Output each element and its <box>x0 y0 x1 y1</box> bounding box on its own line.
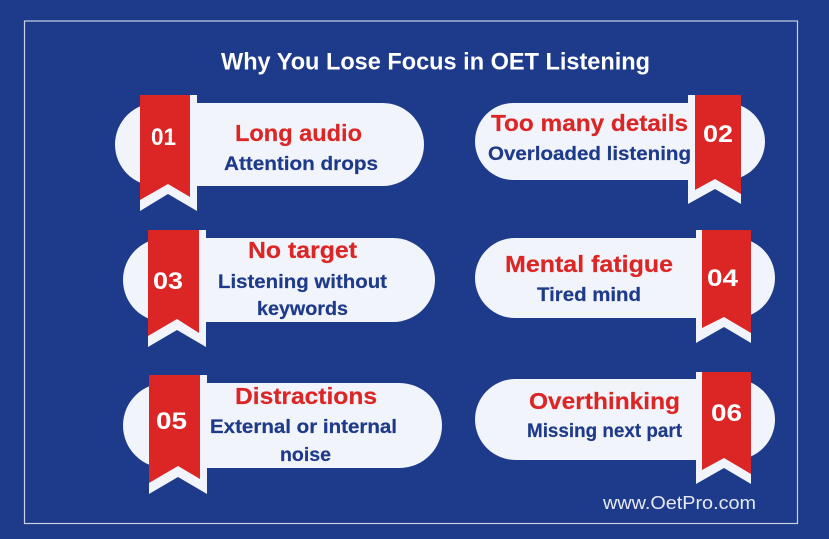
panel: 06 overthinking <box>475 372 775 484</box>
heading 06: Overthinking <box>529 388 680 414</box>
subtext 06: Missing next part <box>527 421 683 442</box>
subtext 05: noise <box>280 445 331 466</box>
ribbon 03 <box>148 230 206 347</box>
pill background 01 <box>115 103 424 186</box>
number 05: 05 <box>156 408 187 435</box>
ribbon 01 <box>140 95 197 211</box>
subtext 01: Attention drops <box>224 154 378 175</box>
panel: 02 too many details <box>475 95 765 204</box>
subtext 03: keywords <box>257 299 348 320</box>
title: Why You Lose Focus in OET Listening <box>221 48 650 76</box>
ribbon 06 <box>696 372 751 484</box>
number 03: 03 <box>153 268 183 295</box>
subtext 05: External or internal <box>210 417 397 438</box>
number 04: 04 <box>707 265 739 292</box>
subtext 03: Listening without <box>218 272 388 293</box>
ribbon 04 <box>696 230 751 343</box>
number 02: 02 <box>703 121 733 148</box>
ribbon 02 <box>688 95 741 204</box>
heading 02: Too many details <box>491 110 688 136</box>
pill background 05 <box>123 383 442 468</box>
subtext 05 <box>210 417 397 466</box>
panel: 04 mental fatigue <box>475 230 775 343</box>
website credit: www.OetPro.com <box>602 492 756 513</box>
panel: 03 no target <box>123 230 435 347</box>
number 06: 06 <box>711 400 742 427</box>
ribbon 05 <box>149 375 207 494</box>
subtext 04: Tired mind <box>537 285 641 306</box>
heading 03: No target <box>248 237 357 263</box>
subtext 02: Overloaded listening <box>488 144 691 165</box>
heading 05: Distractions <box>235 383 377 409</box>
pill background 06 <box>475 379 775 460</box>
heading 04: Mental fatigue <box>505 251 673 277</box>
number 01: 01 <box>151 124 176 151</box>
heading 01: Long audio <box>235 120 362 146</box>
pill background 04 <box>475 238 775 318</box>
panel: 05 distractions <box>123 375 442 494</box>
pill background 02 <box>475 103 765 180</box>
subtext 03 <box>218 272 388 320</box>
pill background 03 <box>123 238 435 322</box>
panel: 01 long audio <box>115 95 424 211</box>
